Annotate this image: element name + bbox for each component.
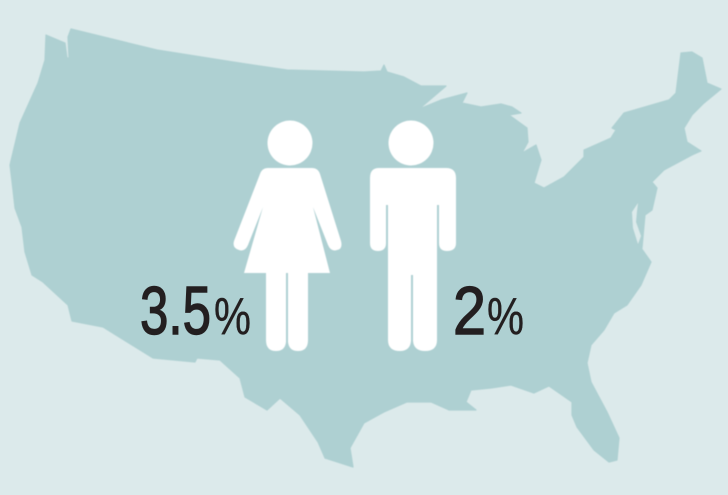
Chesapeake Bay [632,203,641,244]
stat: men 2%: % [487,288,524,346]
woman body [234,168,342,351]
figure: woman [234,120,342,351]
figure: man [370,120,456,351]
stat: women 3.5%: 3.5 [140,273,211,349]
man body [370,168,456,351]
stat: men 2% [453,273,524,349]
woman head [268,120,312,166]
man head [388,120,434,166]
stat: men 2%: 2 [453,273,486,349]
stat: women 3.5%: % [214,288,251,346]
